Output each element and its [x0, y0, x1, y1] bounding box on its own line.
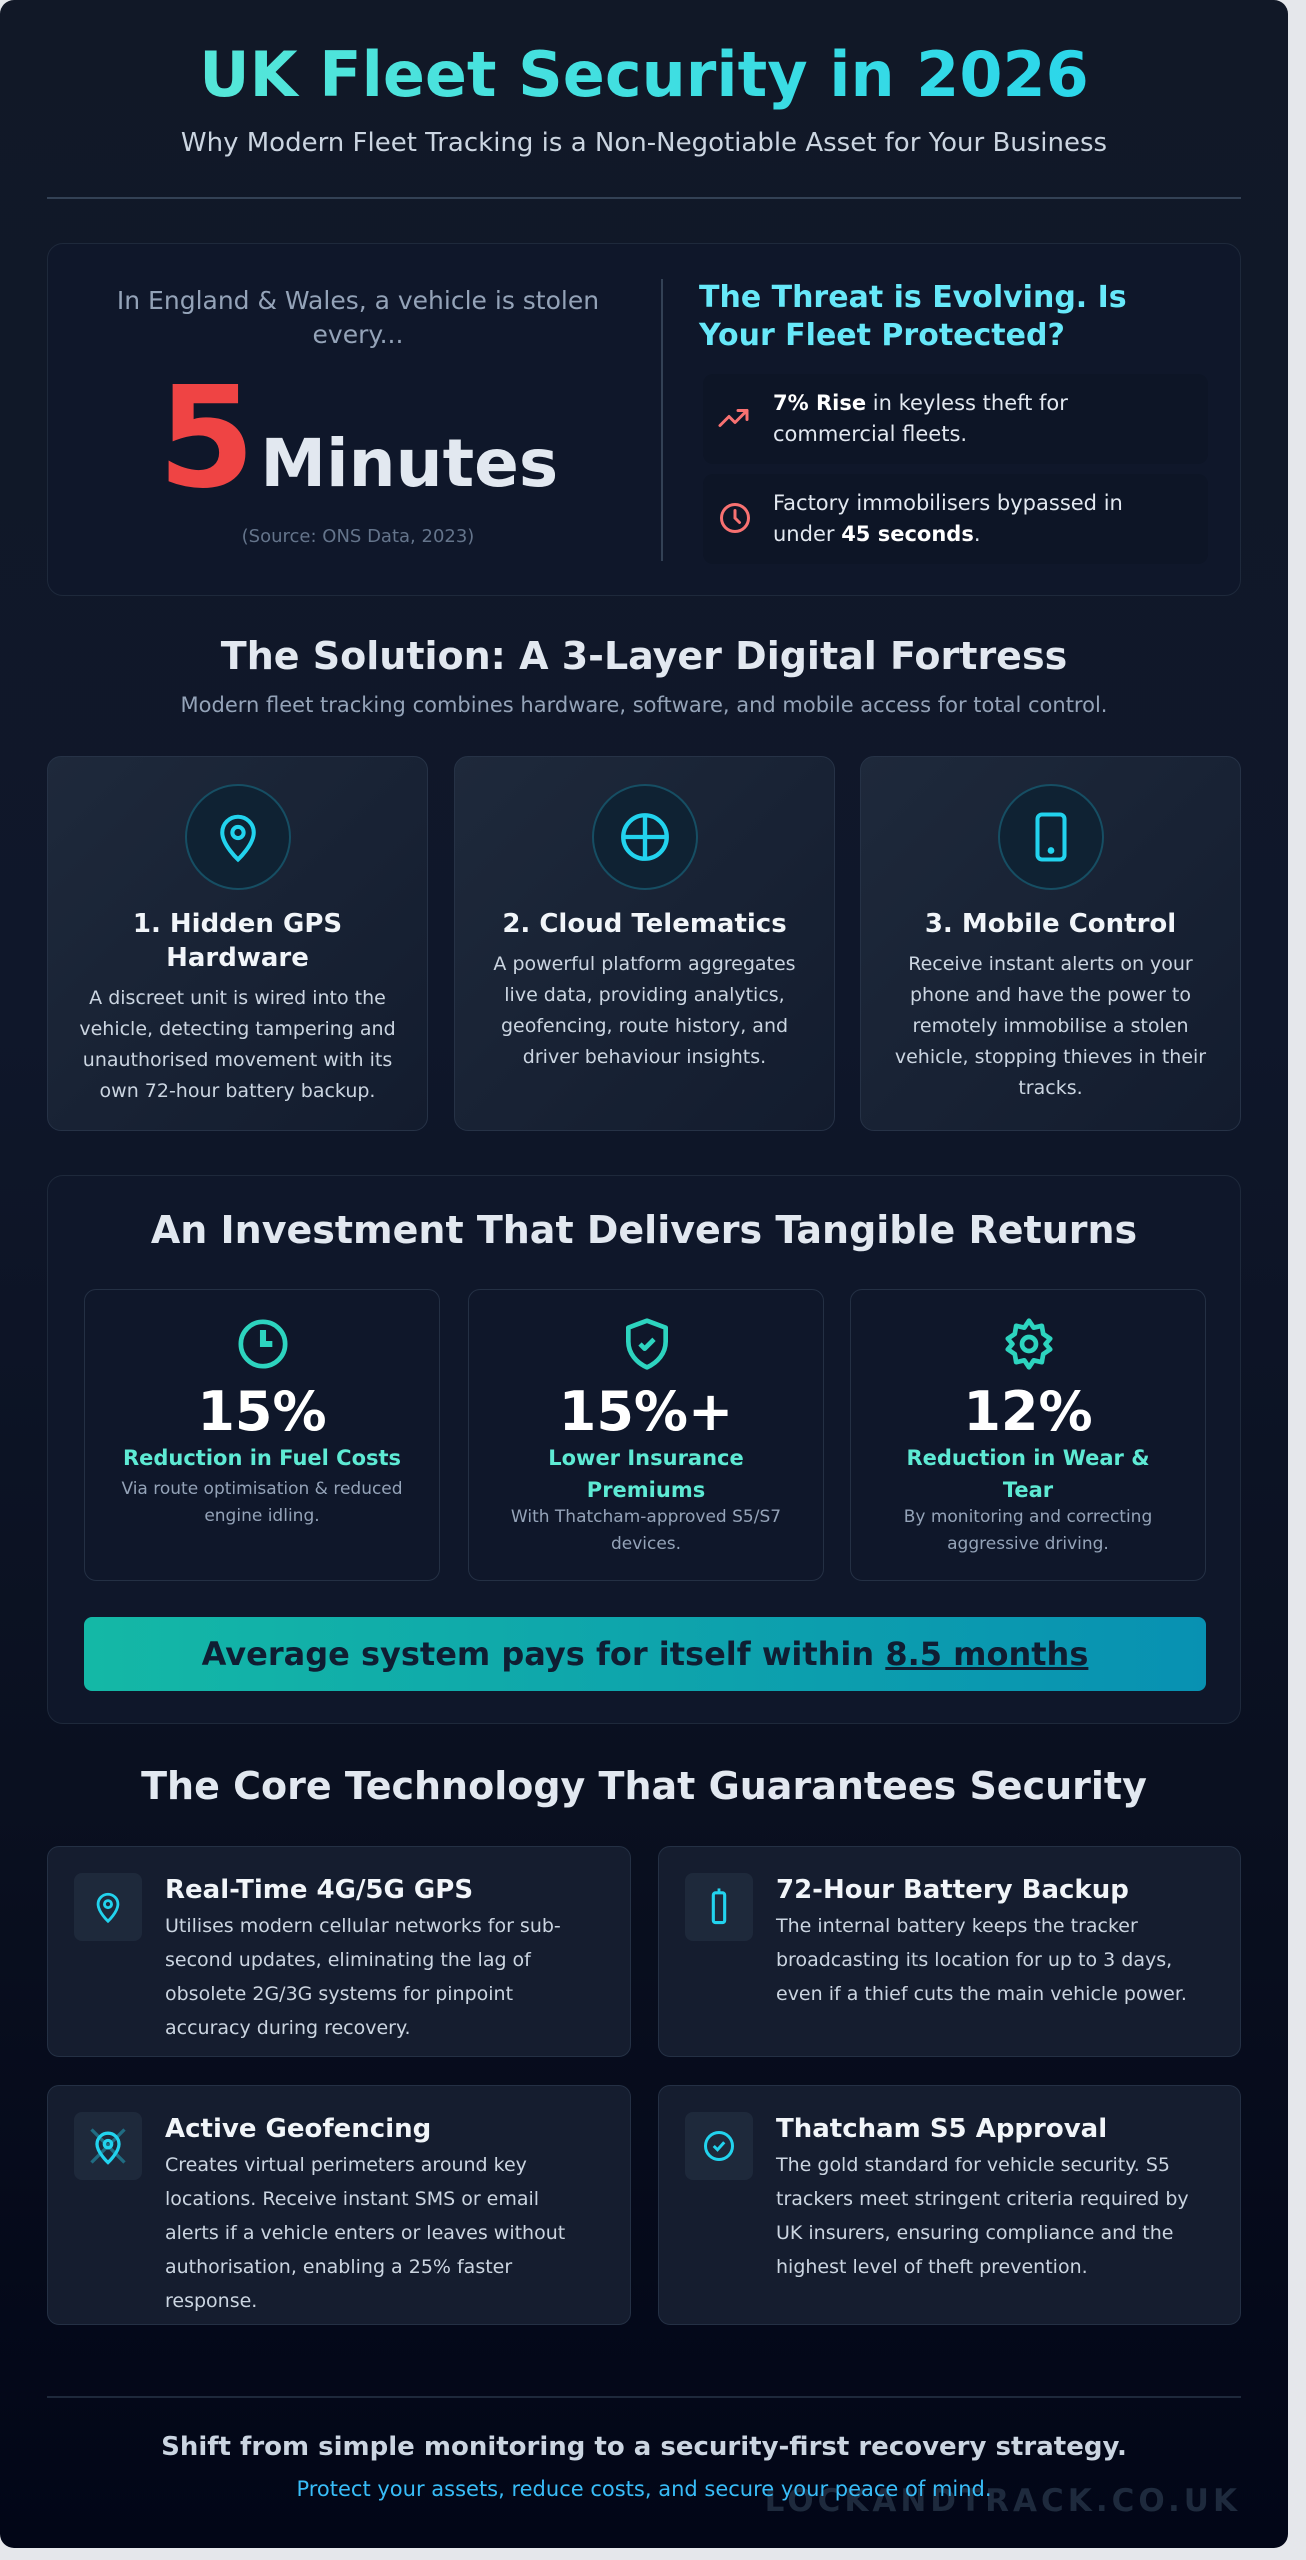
- feature: battery: [658, 1846, 1241, 2057]
- item: keyless theft: commercial fleets.: [773, 422, 967, 446]
- banner: payback: [84, 1617, 1206, 1691]
- stat: insurance: [468, 1289, 824, 1581]
- card: hidden GPS: Hardware: [166, 943, 309, 973]
- subtitle: Why Modern Fleet Tracking is a Non-Negotiable Asset for Your Business: [181, 128, 1107, 158]
- banner: payback: Average system pays for itself within 8.5 months: [202, 1635, 1088, 1673]
- card: hidden GPS: A discreet unit is wired into the vehicle, detecting tampering and unauthorised movement with its own 72-hour battery backup.: [79, 987, 396, 1102]
- feature: geofencing: Creates virtual perimeters around key locations. Receive instant SMS or email alerts if a vehicle enters or leaves without authorisation, enabling a 25% faster response.: [165, 2154, 565, 2312]
- icon: geofence: [74, 2112, 142, 2180]
- source: (Source: ONS Data, 2023): [242, 526, 474, 547]
- icon: check circle: [685, 2112, 753, 2180]
- heading: core technology: The Core Technology That Guarantees Security: [141, 1764, 1147, 1808]
- heading: threat evolving: The Threat is Evolving. Is Your Fleet Protected?: [699, 280, 1127, 353]
- feature: thatcham: The gold standard for vehicle security. S5 trackers meet stringent criteria required by UK insurers, ensuring compliance and the highest level of theft prevention.: [776, 2154, 1189, 2278]
- item: immobilisers bypassed: under 45 seconds.: [773, 522, 981, 546]
- stat: wear: Tear: [1003, 1478, 1053, 1502]
- panel: ROI: [47, 1175, 1241, 1724]
- text: stolen every: In England & Wales, a vehicle is stolen every...: [117, 286, 599, 349]
- stat: wear: By monitoring and correcting aggressive driving.: [904, 1507, 1152, 1554]
- item: keyless theft: 7% Rise in keyless theft for: [773, 391, 1068, 415]
- stat: insurance: 15%+: [559, 1380, 733, 1443]
- title: [0, 38, 1288, 112]
- stat: insurance: Premiums: [587, 1478, 705, 1502]
- card: hidden GPS: 1. Hidden GPS: [133, 909, 342, 939]
- heading: solution: The Solution: A 3-Layer Digital Fortress: [221, 634, 1067, 678]
- card: mobile control: Receive instant alerts on your phone and have the power to remotely immobilise a stolen vehicle, stopping thieves in their tracks.: [895, 953, 1206, 1099]
- icon: location pin: [185, 784, 291, 890]
- feature: GPS: [47, 1846, 631, 2057]
- feature: thatcham: [658, 2085, 1241, 2325]
- stat: fuel: Via route optimisation & reduced engine idling.: [121, 1479, 403, 1526]
- item: keyless theft: [703, 374, 1208, 464]
- feature: geofencing: [47, 2085, 631, 2325]
- panel: threat stats: [47, 243, 1241, 596]
- stat: fuel: Reduction in Fuel Costs: [123, 1446, 401, 1470]
- big stat: 5 minutes: 5 Minutes: [158, 357, 558, 520]
- heading: investment: An Investment That Delivers Tangible Returns: [151, 1208, 1137, 1252]
- stat: wear: 12%: [963, 1380, 1093, 1443]
- icon: crosshair globe: [592, 784, 698, 890]
- card: cloud telematics: A powerful platform aggregates live data, providing analytics, geofencing, route history, and driver behaviour insights.: [493, 953, 796, 1068]
- icon: battery: [685, 1873, 753, 1941]
- feature: GPS: Real-Time 4G/5G GPS: [165, 1875, 473, 1905]
- subheading: solution: Modern fleet tracking combines hardware, software, and mobile access for total control.: [181, 693, 1107, 717]
- item: immobilisers bypassed: [703, 474, 1208, 564]
- feature: battery: 72-Hour Battery Backup: [776, 1875, 1129, 1905]
- icon: clock: [238, 1320, 288, 1368]
- card: cloud telematics: 2. Cloud Telematics: [502, 909, 787, 939]
- stat: wear: [850, 1289, 1206, 1581]
- footer: tagline: Shift from simple monitoring to a security-first recovery strategy.: [161, 2432, 1127, 2462]
- card: hidden GPS: [47, 756, 428, 1131]
- feature: GPS: Utilises modern cellular networks for sub-second updates, eliminating the lag of obsolete 2G/3G systems for pinpoint accuracy during recovery.: [165, 1915, 561, 2039]
- stat: fuel: [84, 1289, 440, 1581]
- feature: battery: The internal battery keeps the tracker broadcasting its location for up to 3 days, even if a thief cuts the main vehicle power.: [776, 1915, 1187, 2005]
- feature: thatcham: Thatcham S5 Approval: [776, 2114, 1107, 2144]
- feature: geofencing: Active Geofencing: [165, 2114, 431, 2144]
- stat: insurance: Lower Insurance: [548, 1446, 744, 1470]
- stat: wear: Reduction in Wear &: [906, 1446, 1150, 1470]
- footer: subline: Protect your assets, reduce costs, and secure your peace of mind.: [296, 2477, 992, 2501]
- icon: clock: [720, 503, 750, 533]
- card: cloud telematics: [454, 756, 835, 1131]
- icon: pin: [74, 1873, 142, 1941]
- item: immobilisers bypassed: Factory immobilisers bypassed in: [773, 491, 1123, 515]
- icon: gear: [1005, 1318, 1053, 1370]
- icon: trend up: [718, 408, 749, 428]
- stat: insurance: With Thatcham-approved S5/S7 devices.: [511, 1507, 781, 1554]
- watermark: LOCKANDTRACK.CO.UK: [765, 2483, 1241, 2519]
- title: UK Fleet Security in 2026: [199, 38, 1089, 111]
- card: mobile control: 3. Mobile Control: [925, 909, 1176, 939]
- card: mobile control: [860, 756, 1241, 1131]
- icon: shield: [626, 1318, 668, 1370]
- icon: phone: [998, 784, 1104, 890]
- stat: fuel: 15%: [197, 1380, 327, 1443]
